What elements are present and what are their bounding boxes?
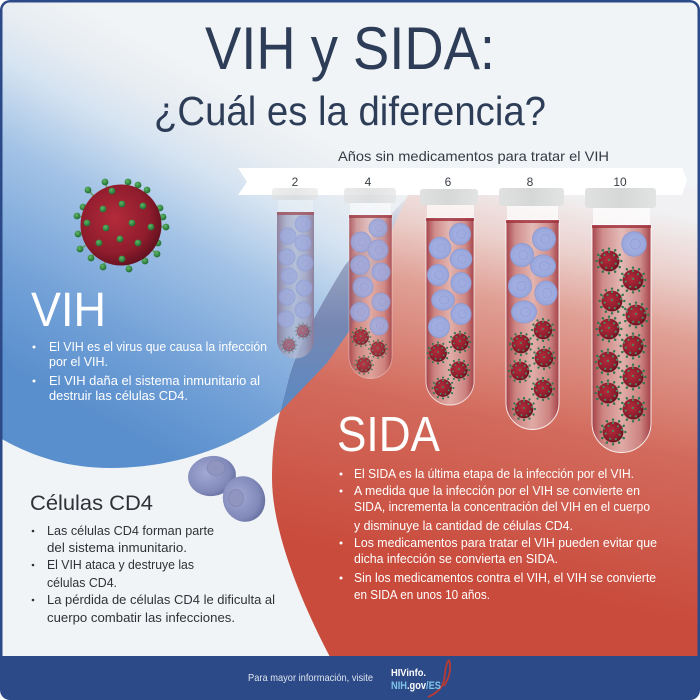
timeline year labels: 10 xyxy=(613,175,627,189)
SIDA bullet list: dicha infección se convierta en SIDA. xyxy=(354,552,558,566)
CD4 bullet list xyxy=(32,524,275,625)
test tube year 8 xyxy=(499,188,564,429)
SIDA bullet list: en SIDA en unos 10 años. xyxy=(354,588,490,602)
panel: VIH blue area xyxy=(0,0,407,468)
timeline year labels: 6 xyxy=(445,175,452,189)
overlap wedge between blue and red xyxy=(280,197,407,412)
timeline year labels: 4 xyxy=(365,175,372,189)
timeline heading: Años sin medicamentos para tratar el VIH xyxy=(338,148,609,164)
SIDA bullet list xyxy=(340,467,657,602)
logo: HIVinfo NIH.gov/ES: NIH.gov/ES xyxy=(391,680,441,692)
logo: HIVinfo NIH.gov/ES: HIVinfo. xyxy=(391,667,426,679)
panel text: CD4 cells xyxy=(30,492,275,625)
CD4 bullet list: Las células CD4 forman parte xyxy=(47,524,214,538)
heading: VIH: VIH xyxy=(31,284,106,337)
VIH bullet list: El VIH daña el sistema inmunitario al xyxy=(49,374,260,388)
icon: CD4 cells xyxy=(185,453,272,528)
footer xyxy=(248,660,450,697)
panel: SIDA red area xyxy=(272,188,698,657)
SIDA bullet list: Sin los medicamentos contra el VIH, el VIH se convierte xyxy=(354,571,656,585)
VIH bullet list: destruir las células CD4. xyxy=(49,389,188,403)
VIH bullet list: por el VIH. xyxy=(49,355,108,369)
CD4 bullet list: El VIH ataca y destruye las xyxy=(47,558,194,572)
CD4 bullet list: del sistema inmunitario. xyxy=(47,541,187,555)
footer text: Para mayor información, visite xyxy=(248,672,373,684)
timeline year labels: 8 xyxy=(527,175,534,189)
panel text: SIDA xyxy=(337,408,657,602)
test tube year 2 xyxy=(272,188,318,358)
panel text: VIH xyxy=(31,284,267,403)
test tube year 10 xyxy=(585,188,656,452)
heading: Células CD4: Células CD4 xyxy=(30,492,153,515)
VIH bullet list: El VIH es el virus que causa la infección xyxy=(49,340,267,354)
heading: SIDA: SIDA xyxy=(337,408,440,462)
VIH bullet list xyxy=(32,340,267,403)
icon: HIV virus xyxy=(74,179,169,272)
title: VIH y SIDA: xyxy=(205,15,495,82)
title xyxy=(154,15,546,134)
CD4 bullet list: La pérdida de células CD4 le dificulta al xyxy=(47,593,275,607)
test tube year 6 xyxy=(420,189,478,405)
logo: HIVinfo NIH.gov/ES xyxy=(391,660,450,697)
SIDA bullet list: Los medicamentos para tratar el VIH pueden evitar que xyxy=(354,536,657,550)
timeline ribbon xyxy=(238,168,687,195)
SIDA bullet list: y disminuye la cantidad de células CD4. xyxy=(354,519,573,533)
test tube year 4 xyxy=(344,188,396,378)
SIDA bullet list: SIDA, incrementa la concentración del VIH en el cuerpo xyxy=(354,500,650,514)
SIDA bullet list: A medida que la infección por el VIH se convierte en xyxy=(354,484,640,498)
CD4 bullet list: células CD4. xyxy=(47,576,117,590)
SIDA bullet list: El SIDA es la última etapa de la infección por el VIH. xyxy=(354,467,634,481)
CD4 bullet list: cuerpo combatir las infecciones. xyxy=(47,611,235,625)
timeline year labels xyxy=(292,175,627,189)
title: ¿Cuál es la diferencia? xyxy=(154,88,546,134)
timeline year labels: 2 xyxy=(292,175,299,189)
